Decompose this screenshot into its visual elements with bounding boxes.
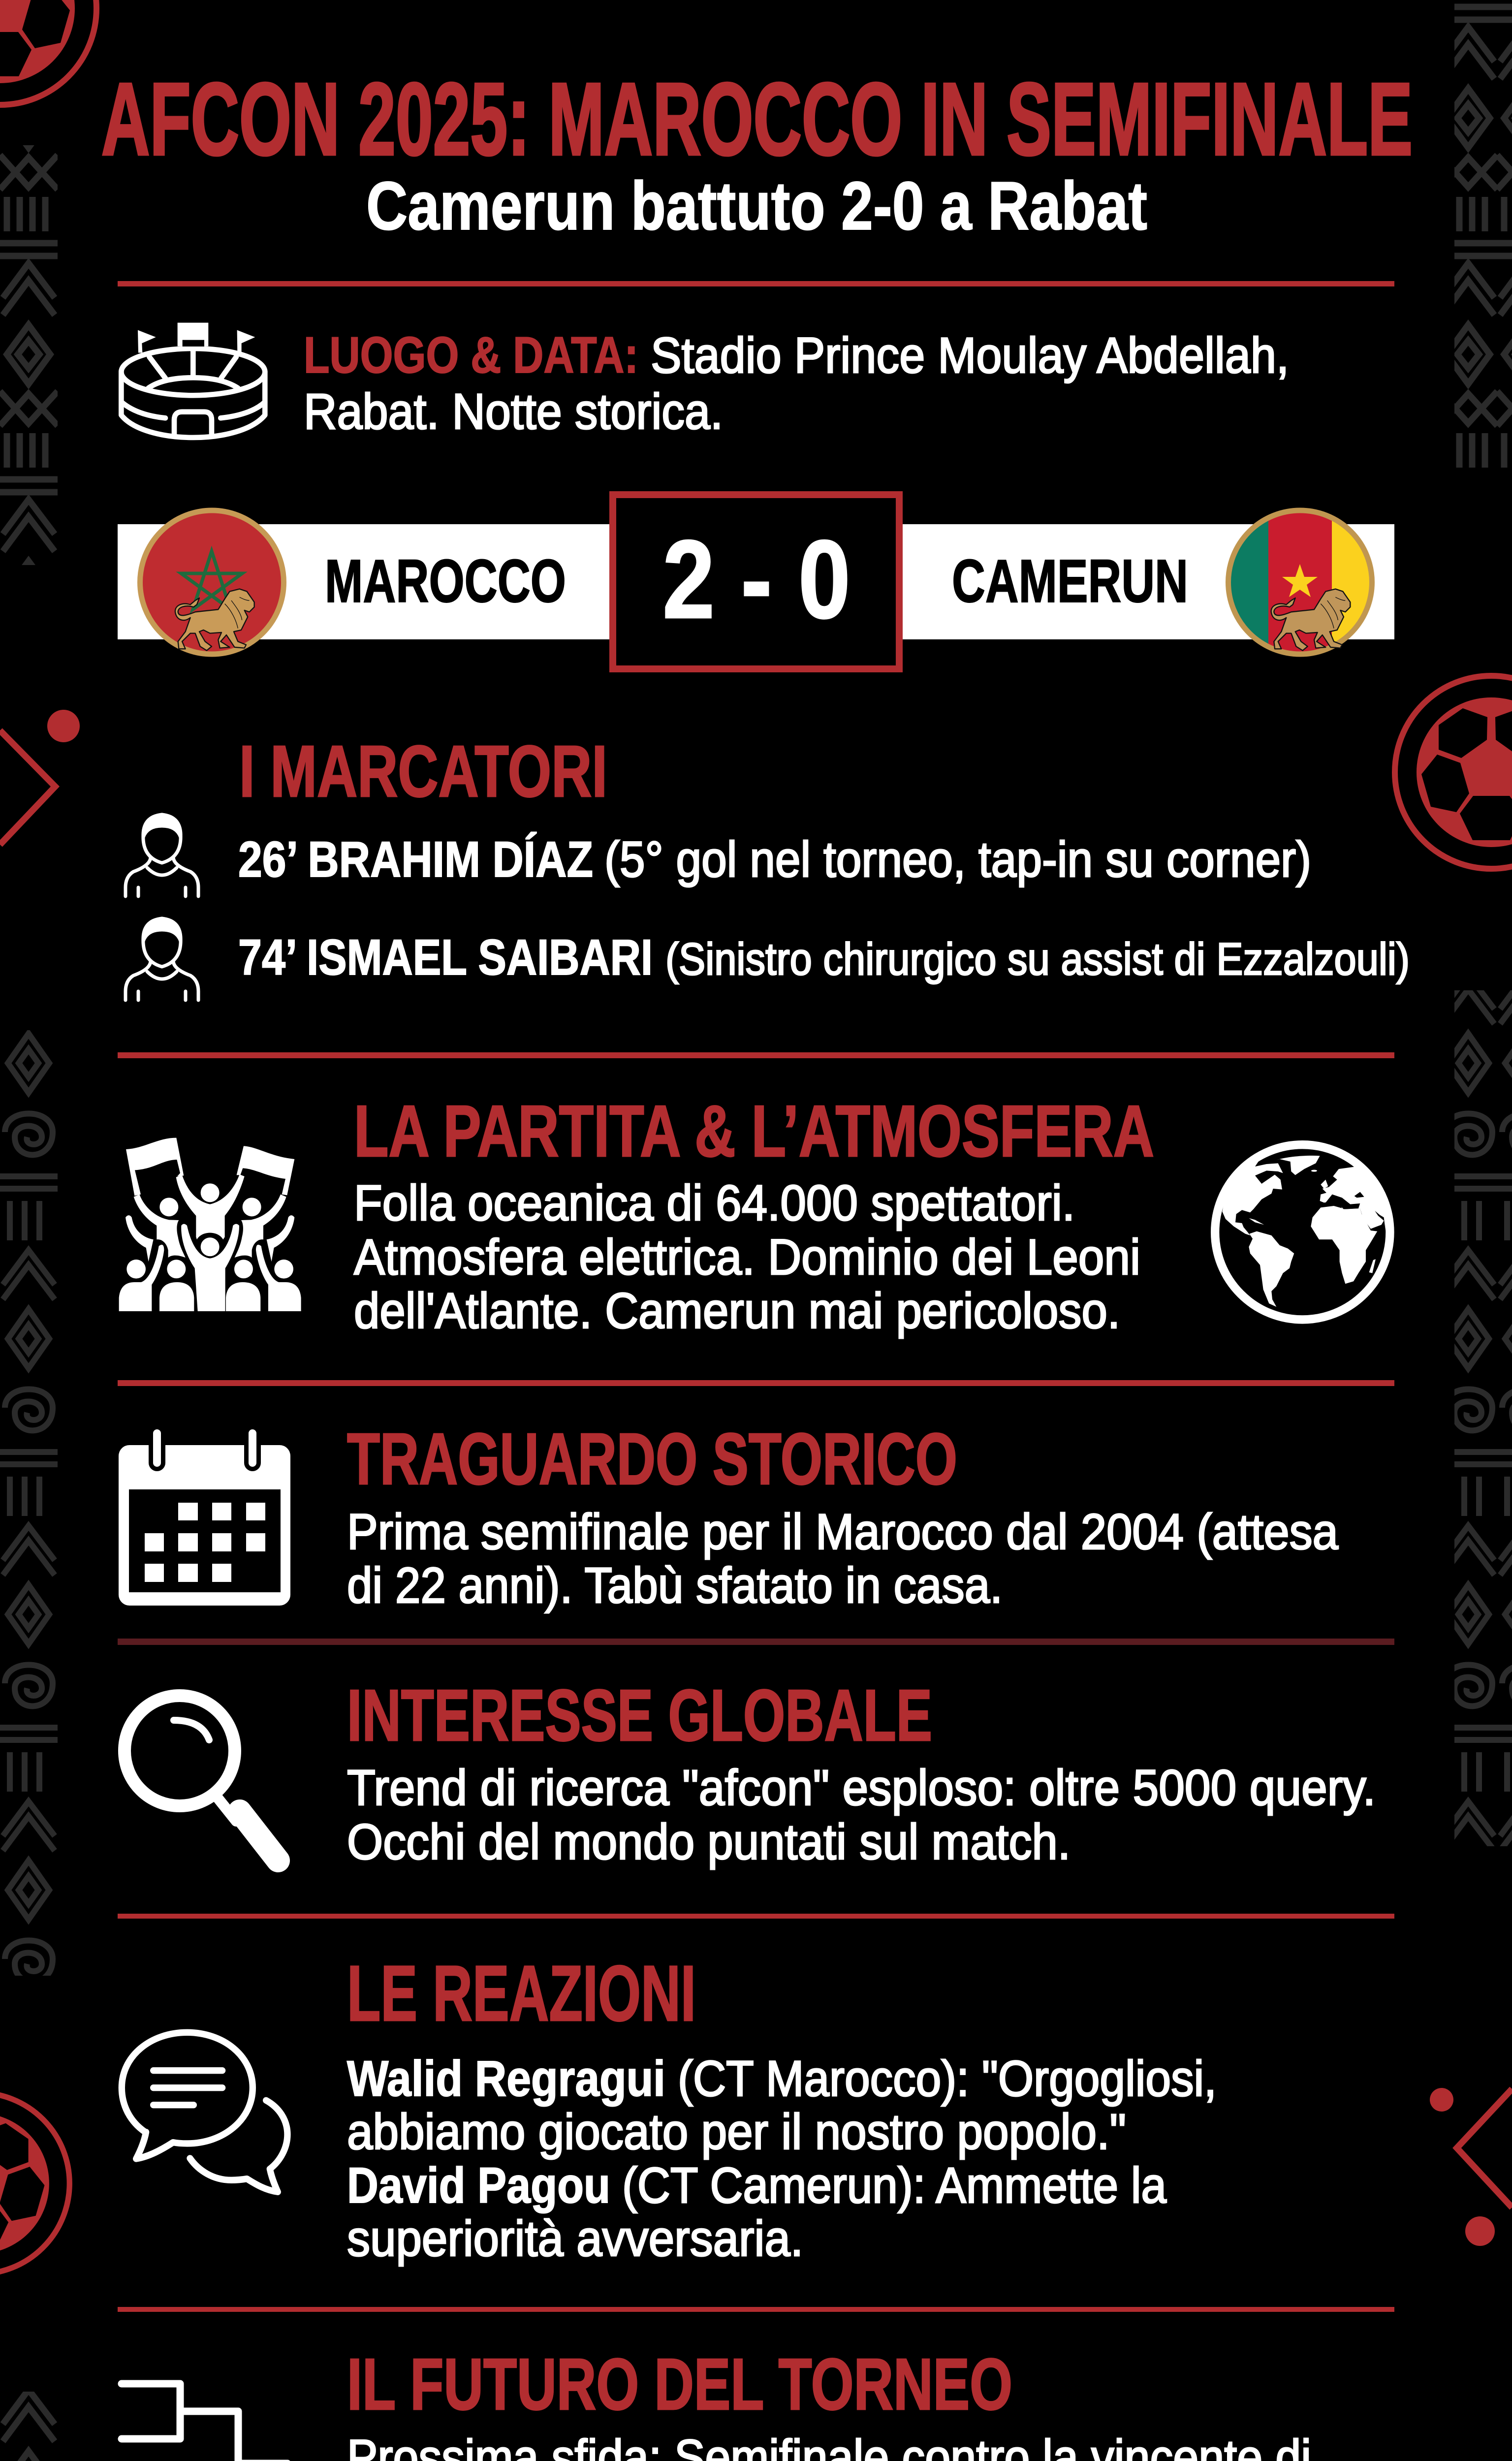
text: interesse globale xyxy=(347,1760,1376,1870)
decor: right chevron and dots xyxy=(1430,2088,1512,2246)
text: luogo e data xyxy=(304,327,1289,440)
decor: football left lower xyxy=(0,2093,69,2274)
text: la partita: dell'Atlante. Camerun mai pericoloso. xyxy=(354,1283,1120,1339)
icon: magnifier xyxy=(125,1696,278,1861)
scorer 1: 26’ BRAHIM DÍAZ xyxy=(238,831,593,887)
team name: Marocco: MAROCCO xyxy=(325,548,566,615)
text: le reazioni xyxy=(347,2051,1217,2267)
score box xyxy=(613,495,899,669)
icon: tournament bracket xyxy=(122,2384,287,2461)
heading: le reazioni: LE REAZIONI xyxy=(347,1949,696,2037)
decor: left chevron and dot xyxy=(0,710,80,845)
heading: la partita: LA PARTITA & L’ATMOSFERA xyxy=(354,1091,1154,1172)
text: traguardo storico: Prima semifinale per il Marocco dal 2004 (attesa xyxy=(347,1504,1338,1560)
text: le reazioni: (CT Marocco): "Orgogliosi, xyxy=(678,2051,1217,2107)
heading: traguardo storico: TRAGUARDO STORICO xyxy=(347,1419,957,1500)
icon: player 2 xyxy=(126,918,198,1000)
icon: calendar xyxy=(119,1430,290,1606)
icon: speech bubbles xyxy=(122,2032,287,2192)
decor: football top left xyxy=(0,0,96,105)
text: le reazioni: superiorità avversaria. xyxy=(347,2210,803,2267)
text: le reazioni: abbiamo giocato per il nostro popolo." xyxy=(347,2104,1126,2160)
scorer 1: (5° gol nel torneo, tap-in su corner) xyxy=(604,831,1311,887)
text: le reazioni: Walid Regragui xyxy=(347,2051,665,2107)
decor: football right xyxy=(1395,676,1512,869)
score: 2 - 0 xyxy=(662,517,850,641)
scorer 1 xyxy=(238,831,1311,887)
scorer 2: 74’ ISMAEL SAIBARI xyxy=(238,929,653,985)
text: la partita xyxy=(354,1175,1140,1339)
text: luogo e data: Rabat. Notte storica. xyxy=(304,383,723,440)
text: le reazioni: David Pagou xyxy=(347,2157,610,2213)
icon: stadium xyxy=(121,323,265,438)
text: interesse globale: Trend di ricerca "afcon" esploso: oltre 5000 query. xyxy=(347,1760,1376,1816)
text: luogo e data: Stadio Prince Moulay Abdellah, xyxy=(651,327,1289,383)
flag badge: Marocco xyxy=(140,510,284,654)
text: traguardo storico: di 22 anni). Tabù sfatato in casa. xyxy=(347,1557,1003,1613)
icon: player 1 xyxy=(126,815,198,896)
heading: i marcatori: I MARCATORI xyxy=(239,731,607,812)
icon: crowd xyxy=(119,1138,301,1311)
icon: globe xyxy=(1215,1145,1390,1320)
text: le reazioni: (CT Camerun): Ammette la xyxy=(622,2157,1166,2213)
scorer 2: (Sinistro chirurgico su assist di Ezzalzouli) xyxy=(665,934,1410,984)
score band xyxy=(118,495,1394,669)
subtitle: Camerun battuto 2-0 a Rabat xyxy=(366,168,1147,244)
flag badge: Camerun xyxy=(1226,507,1376,660)
text: la partita: Atmosfera elettrica. Dominio dei Leoni xyxy=(354,1229,1140,1285)
text: traguardo storico xyxy=(347,1504,1338,1613)
text: interesse globale: Occhi del mondo puntati sul match. xyxy=(347,1814,1071,1870)
text: luogo e data: LUOGO & DATA: xyxy=(304,327,638,384)
white band xyxy=(118,524,1394,639)
team name: Camerun: CAMERUN xyxy=(952,548,1188,615)
heading: interesse globale: INTERESSE GLOBALE xyxy=(347,1675,932,1756)
scorer 2 xyxy=(238,929,1410,985)
heading: il futuro del torneo: IL FUTURO DEL TORNEO xyxy=(347,2344,1012,2425)
text: la partita: Folla oceanica di 64.000 spettatori. xyxy=(354,1175,1075,1231)
